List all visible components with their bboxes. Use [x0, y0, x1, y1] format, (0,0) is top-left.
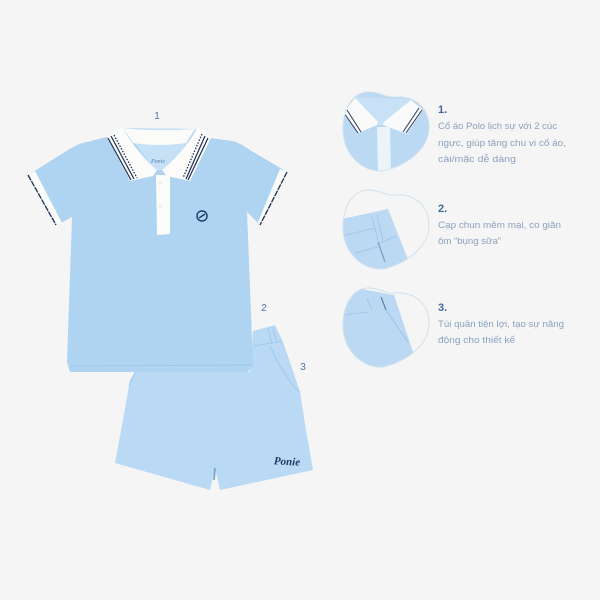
polo shirt	[28, 128, 287, 372]
text block 3: Túi quần tiện lợi, tạo sự năng	[438, 319, 564, 330]
sleeve cuffs	[28, 171, 62, 225]
shorts	[115, 325, 313, 490]
text block 2: 2.	[438, 203, 447, 215]
text block 1: cài/mặc dễ dàng	[438, 154, 516, 165]
number 3: 3	[300, 362, 306, 373]
number 1: 1	[154, 111, 160, 122]
detail blob 1: collar	[340, 90, 432, 174]
text block 2	[438, 203, 561, 247]
inner neck	[123, 128, 195, 170]
collar stripes	[108, 136, 208, 180]
collar back stand	[123, 128, 195, 145]
chest logo	[197, 211, 207, 221]
text block 1: Cổ áo Polo lịch sự với 2 cúc	[438, 121, 557, 132]
text block 2: Cạp chun mềm mại, co giãn	[438, 220, 561, 231]
detail blob 2: waistband	[340, 190, 429, 275]
detail blob 3: pocket	[342, 288, 430, 368]
polo shirt: Ponie	[150, 159, 165, 165]
text block 1	[438, 104, 566, 165]
number 2: 2	[261, 303, 267, 314]
shorts logo text: Ponie	[274, 455, 301, 469]
text block 2: ôm “bụng sữa”	[438, 236, 501, 247]
text block 3	[438, 302, 564, 346]
text block 1: ngực, giúp tăng chu vi cổ áo,	[438, 138, 566, 149]
text block 3: động cho thiết kế	[438, 335, 516, 346]
placket	[156, 175, 170, 235]
shorts waistband and pockets	[129, 327, 300, 392]
text block 3: 3.	[438, 302, 447, 314]
text block 1: 1.	[438, 104, 447, 116]
collar	[107, 128, 157, 181]
